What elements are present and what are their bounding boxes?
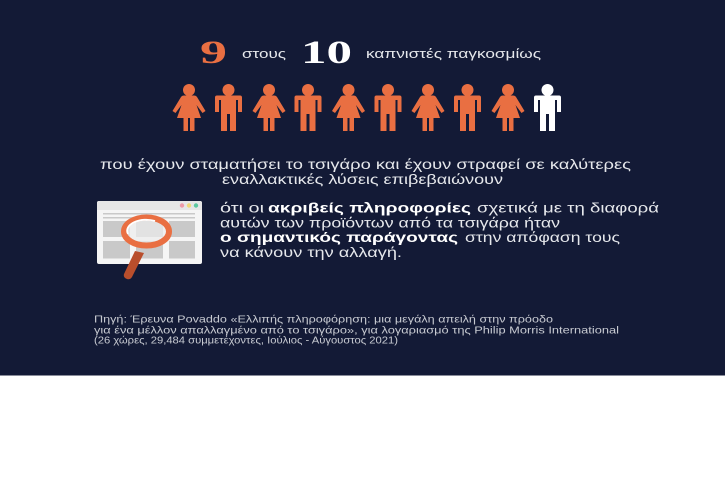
icon: orange woman 7 xyxy=(412,84,444,131)
paragraph line 1 bold: ακριβείς πληροφορίες xyxy=(268,200,471,216)
page content blocks xyxy=(103,213,195,258)
icon: orange woman 9 xyxy=(492,84,524,131)
source line 1: Πηγή: Έρευνα Povaddo «Ελλιπής πληροφόρηση: μια μεγάλη απειλή στην πρόοδο xyxy=(94,314,553,326)
words καπνιστές παγκοσμίως: καπνιστές παγκοσμίως xyxy=(366,46,541,61)
icon: orange woman 3 xyxy=(252,84,286,131)
paragraph line 2: αυτών των προϊόντων από τα τσιγάρα ήταν xyxy=(220,214,560,230)
window control dots xyxy=(180,203,198,208)
row of ten person icons xyxy=(172,84,561,131)
word στους: στους xyxy=(242,46,286,61)
icon: orange woman 1 xyxy=(172,84,206,131)
icon: browser window with magnifying glass xyxy=(97,201,202,279)
number 9: 9 xyxy=(200,35,227,71)
browser window frame xyxy=(97,201,202,264)
icon: orange man 6 xyxy=(374,84,402,131)
source line 2: για ένα μέλλον απαλλαγμένο από το τσιγάρο», για λογαριασμό της Philip Morris International xyxy=(94,324,619,336)
icon: orange woman 5 xyxy=(332,84,365,131)
icon: orange man 8 xyxy=(454,84,481,131)
source line 3: (26 χώρες, 29,484 συμμετέχοντες, Ιούλιος - Αύγουστος 2021) xyxy=(94,334,398,346)
source note xyxy=(94,314,619,346)
icon: white man 10 xyxy=(534,84,561,131)
magnifying glass lens xyxy=(124,218,169,246)
explanatory paragraph xyxy=(220,200,659,260)
paragraph line 3 end: στην απόφαση τους xyxy=(465,229,620,245)
intro line 2: εναλλακτικές λύσεις επιβεβαιώνουν xyxy=(222,172,503,187)
paragraph line 1 end: σχετικά με τη διαφορά xyxy=(477,200,659,216)
magnifying glass handle xyxy=(124,251,144,279)
icon: orange man 4 xyxy=(294,84,322,131)
lens inner highlight xyxy=(127,220,155,234)
paragraph line 1 regular: ότι οι xyxy=(220,200,264,216)
paragraph line 4: να κάνουν την αλλαγή. xyxy=(220,244,402,260)
icon: orange man 2 xyxy=(215,84,242,131)
dark background panel xyxy=(0,0,725,376)
browser title bar xyxy=(97,201,202,210)
paragraph line 3 bold: ο σημαντικός παράγοντας xyxy=(220,229,458,245)
headline: 9 στους 10 καπνιστές παγκοσμίως xyxy=(200,35,541,71)
number 10: 10 xyxy=(301,35,352,71)
intro text xyxy=(100,157,632,187)
intro line 1: που έχουν σταματήσει το τσιγάρο και έχουν στραφεί σε καλύτερες xyxy=(100,157,632,172)
